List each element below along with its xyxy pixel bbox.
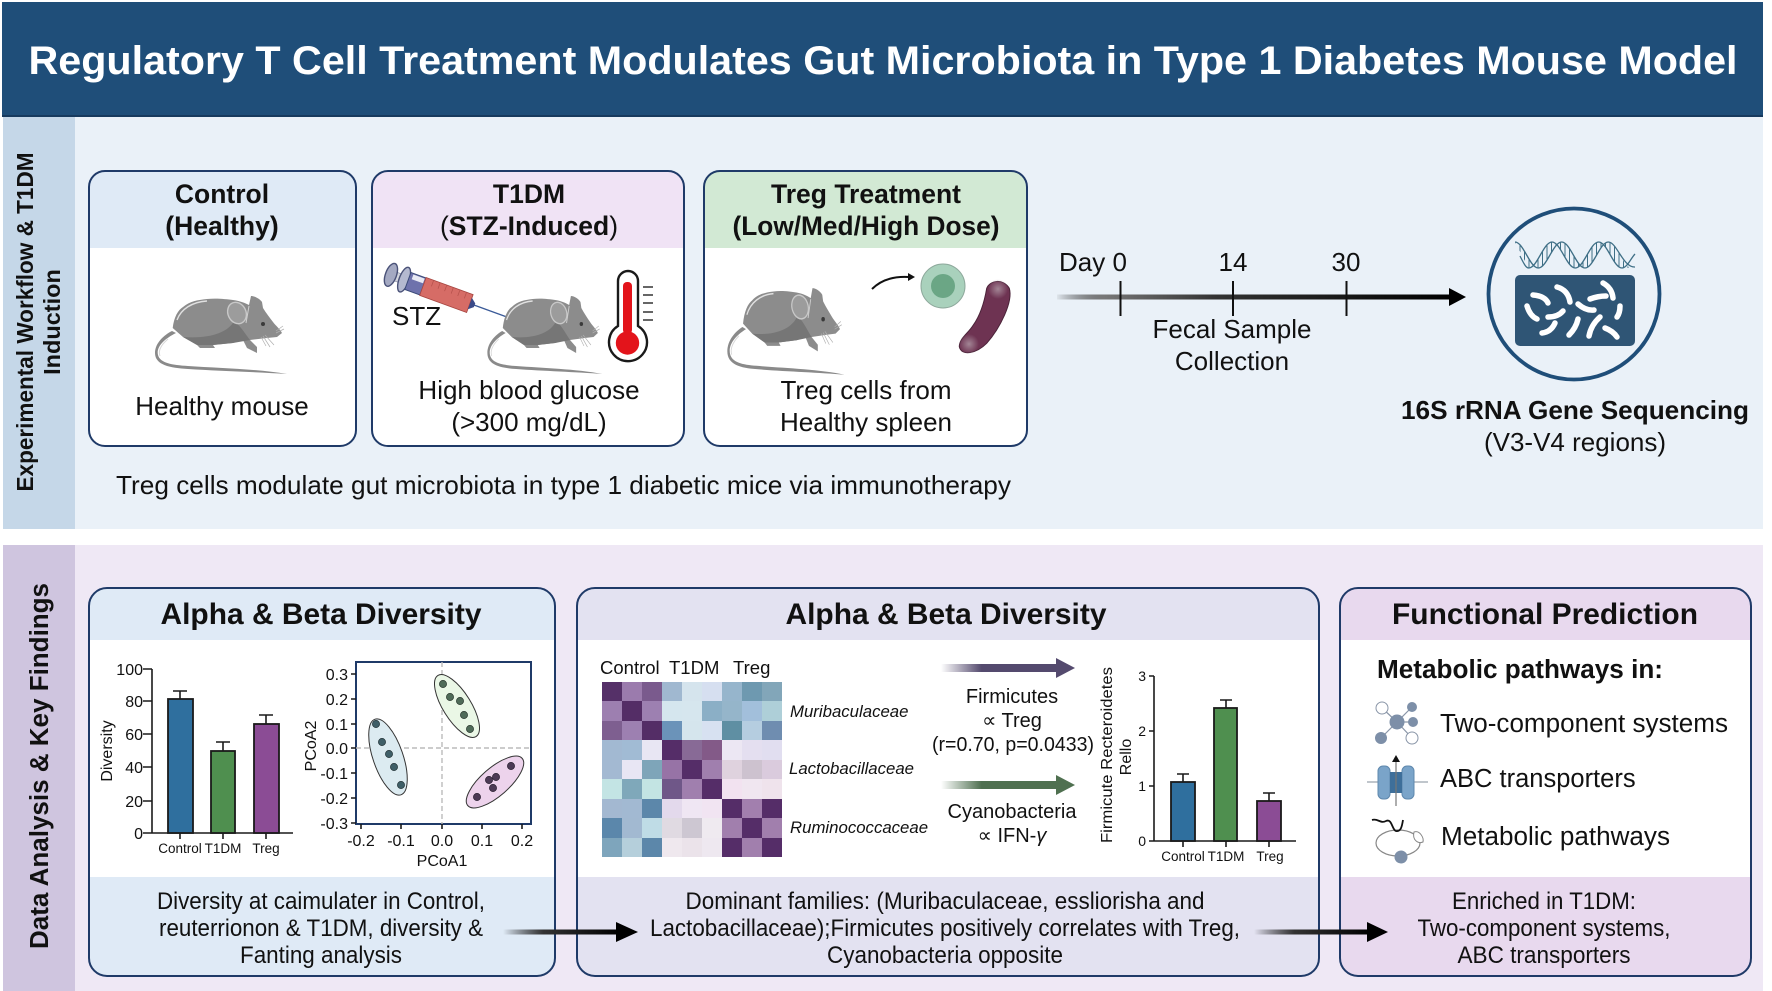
card: taxonomic composition bbox=[577, 588, 1319, 976]
bar chart: Firmicutes/Bacteroidetes ratio: T1DM bbox=[1208, 849, 1244, 864]
card: alpha and beta diversity: Alpha & Beta Diversity bbox=[160, 598, 482, 631]
correlation: Firmicutes: (r=0.70, p=0.0433) bbox=[932, 734, 1094, 756]
heatmap: Treg bbox=[733, 657, 770, 678]
icon: network bbox=[1375, 702, 1418, 744]
bar chart: diversity: 40 bbox=[125, 760, 143, 777]
sidebar: experimental workflow bbox=[3, 117, 75, 529]
scatter plot: PCoA: 0.0 bbox=[431, 833, 453, 850]
bar chart: diversity: Diversity bbox=[99, 720, 116, 782]
summary: function: Enriched in T1DM: bbox=[1452, 888, 1636, 915]
scatter plot: PCoA: 0.0 bbox=[326, 741, 348, 758]
icon: spleen bbox=[959, 279, 1010, 354]
card: control: Healthy mouse bbox=[135, 391, 309, 421]
bar chart: diversity: T1DM bbox=[205, 841, 241, 856]
card: functional prediction: Metabolic pathways bbox=[1441, 823, 1670, 851]
icon: Treg cell bbox=[921, 264, 965, 308]
arrow: diversity to taxonomy bbox=[503, 922, 638, 942]
card: T1DM bbox=[372, 171, 684, 446]
card: T1DM: High blood glucose bbox=[418, 375, 640, 405]
scatter plot: PCoA: 0.3 bbox=[326, 667, 348, 684]
arrow: Firmicutes bbox=[941, 658, 1075, 678]
title banner bbox=[2, 2, 1763, 117]
correlation: Cyanobacteria: ∝ IFN-γ bbox=[978, 825, 1047, 847]
sequencing label: (V3-V4 regions) bbox=[1484, 427, 1666, 457]
card: functional prediction: Metabolic pathways in: bbox=[1377, 656, 1663, 684]
scatter plot: PCoA: -0.2 bbox=[320, 791, 348, 808]
scatter plot: PCoA: 0.2 bbox=[326, 692, 348, 709]
card: taxonomic composition: Alpha & Beta Diversity bbox=[786, 598, 1107, 631]
heatmap: Lactobacillaceae bbox=[789, 759, 914, 778]
card: functional prediction: Functional Prediction bbox=[1392, 598, 1698, 631]
panel: data analysis bbox=[3, 545, 1763, 991]
scatter plot: PCoA: PCoA2 bbox=[303, 721, 320, 771]
scatter plot: PCoA: 0.1 bbox=[326, 717, 348, 734]
scatter plot: PCoA: -0.1 bbox=[320, 766, 348, 783]
card: Treg treatment: Treg Treatment bbox=[771, 179, 961, 209]
arrow: taxonomy to function bbox=[1254, 922, 1388, 942]
summary: diversity: Diversity at caimulater in Control, bbox=[157, 888, 485, 915]
heatmap bbox=[600, 657, 928, 857]
sequencing label: 16S rRNA Gene Sequencing bbox=[1401, 395, 1749, 425]
timeline: 14 bbox=[1219, 247, 1247, 277]
timeline: 30 bbox=[1332, 247, 1360, 277]
correlation: Cyanobacteria bbox=[948, 801, 1077, 847]
bar chart: Firmicutes/Bacteroidetes ratio: Treg bbox=[1256, 849, 1284, 864]
icon: sequencing bbox=[1488, 208, 1660, 380]
sidebar: data analysis: Data Analysis & Key Findings bbox=[26, 583, 54, 949]
bar chart: Firmicutes/Bacteroidetes ratio: Firmicute Recteroidetes bbox=[1099, 667, 1116, 843]
summary: diversity: reuterrionon & T1DM, diversity & bbox=[159, 915, 483, 942]
bar chart: Firmicutes/Bacteroidetes ratio: 1 bbox=[1138, 778, 1146, 794]
heatmap: Ruminococcaceae bbox=[790, 818, 928, 837]
bar chart: diversity: 60 bbox=[125, 727, 143, 744]
card: control: Control bbox=[175, 179, 269, 209]
summary: taxonomy: Cyanobacteria opposite bbox=[827, 942, 1063, 969]
scatter plot: PCoA: -0.3 bbox=[320, 816, 348, 833]
correlation: Firmicutes bbox=[932, 686, 1094, 756]
summary: taxonomy bbox=[650, 888, 1240, 969]
card: T1DM: T1DM bbox=[493, 179, 565, 209]
icon: DNA helix bbox=[1515, 242, 1635, 268]
sidebar: data analysis bbox=[3, 545, 75, 991]
bar chart: diversity: 20 bbox=[125, 794, 143, 811]
card: T1DM: (>300 mg/dL) bbox=[451, 407, 607, 437]
bar chart: Firmicutes/Bacteroidetes ratio: 3 bbox=[1138, 668, 1146, 684]
scatter plot: PCoA: 0.1 bbox=[471, 833, 493, 850]
summary: diversity bbox=[157, 888, 485, 969]
icon: bacteria bbox=[1527, 283, 1620, 337]
bar chart: Firmicutes/Bacteroidetes ratio: Control bbox=[1161, 849, 1205, 864]
icon: diabetic mouse bbox=[487, 296, 602, 374]
scatter plot: PCoA: PCoA1 bbox=[417, 853, 467, 870]
title: Regulatory T Cell Treatment Modulates Gut Microbiota in Type 1 Diabetes Mouse Model bbox=[28, 39, 1738, 83]
timeline: Fecal Sample bbox=[1153, 314, 1311, 344]
icon: thermometer bbox=[609, 271, 653, 361]
icon: healthy mouse bbox=[155, 296, 287, 374]
card: functional prediction: Two-component systems bbox=[1440, 710, 1728, 738]
card: T1DM: (STZ-Induced) bbox=[440, 211, 618, 241]
bar chart: Firmicutes/Bacteroidetes ratio bbox=[1099, 667, 1296, 864]
card: Treg treatment: Treg cells from bbox=[781, 375, 951, 405]
timeline: Collection bbox=[1175, 346, 1289, 376]
timeline: Day 0 bbox=[1059, 247, 1127, 277]
icon: metabolic pathway bbox=[1372, 820, 1423, 864]
summary: diversity: Fanting analysis bbox=[240, 942, 402, 969]
bar chart: diversity: Treg bbox=[252, 841, 280, 856]
scatter plot: PCoA: 0.2 bbox=[511, 833, 533, 850]
sidebar: experimental workflow: Induction bbox=[39, 269, 65, 375]
bar chart: diversity: 0 bbox=[134, 826, 143, 843]
card: T1DM: STZ bbox=[392, 301, 441, 331]
bar chart: diversity bbox=[99, 662, 293, 856]
correlation: Firmicutes: Firmicutes bbox=[966, 686, 1058, 708]
panel: experimental workflow bbox=[3, 117, 1763, 529]
caption: Treg cells modulate gut microbiota in type 1 diabetic mice via immunotherapy bbox=[116, 470, 1011, 500]
icon: syringe bbox=[381, 261, 511, 329]
sequencing label bbox=[1401, 395, 1749, 457]
summary: function: ABC transporters bbox=[1458, 942, 1630, 969]
heatmap: Muribaculaceae bbox=[790, 702, 908, 721]
scatter plot: PCoA bbox=[303, 662, 533, 870]
summary: taxonomy: Dominant families: (Muribaculaceae, essliorisha and bbox=[686, 888, 1204, 915]
bar chart: diversity: 100 bbox=[116, 662, 143, 679]
summary: function bbox=[1418, 888, 1670, 969]
bar chart: diversity: Control bbox=[158, 841, 202, 856]
icon: ABC transporter bbox=[1367, 755, 1428, 806]
card: functional prediction: ABC transporters bbox=[1440, 765, 1636, 793]
card: Treg treatment: Healthy spleen bbox=[780, 407, 952, 437]
timeline bbox=[1057, 247, 1466, 376]
card: alpha and beta diversity bbox=[89, 588, 555, 976]
card: functional prediction bbox=[1340, 588, 1751, 976]
bar chart: diversity: 80 bbox=[125, 694, 143, 711]
correlation: Firmicutes: ∝ Treg bbox=[982, 710, 1042, 732]
heatmap: Control bbox=[600, 657, 660, 678]
scatter plot: PCoA: -0.2 bbox=[347, 833, 375, 850]
bar chart: Firmicutes/Bacteroidetes ratio: 0 bbox=[1138, 833, 1146, 849]
correlation: Cyanobacteria: Cyanobacteria bbox=[948, 801, 1077, 823]
bar chart: Firmicutes/Bacteroidetes ratio: Rello bbox=[1118, 739, 1135, 775]
summary: function: Two-component systems, bbox=[1418, 915, 1670, 942]
card: Treg treatment bbox=[704, 171, 1027, 446]
sidebar: experimental workflow: Experimental Workflow & T1DM bbox=[12, 152, 38, 492]
card: control: (Healthy) bbox=[165, 211, 279, 241]
card: Treg treatment: (Low/Med/High Dose) bbox=[732, 211, 1000, 241]
icon: treated mouse bbox=[727, 288, 844, 375]
bar chart: Firmicutes/Bacteroidetes ratio: 2 bbox=[1138, 723, 1146, 739]
summary: taxonomy: Lactobacillaceae);Firmicutes positively correlates with Treg, bbox=[650, 915, 1240, 942]
card: control bbox=[89, 171, 356, 446]
heatmap: T1DM bbox=[669, 657, 719, 678]
arrow: to Treg cell bbox=[872, 273, 915, 289]
arrow: Cyanobacteria bbox=[941, 775, 1075, 795]
scatter plot: PCoA: -0.1 bbox=[387, 833, 415, 850]
